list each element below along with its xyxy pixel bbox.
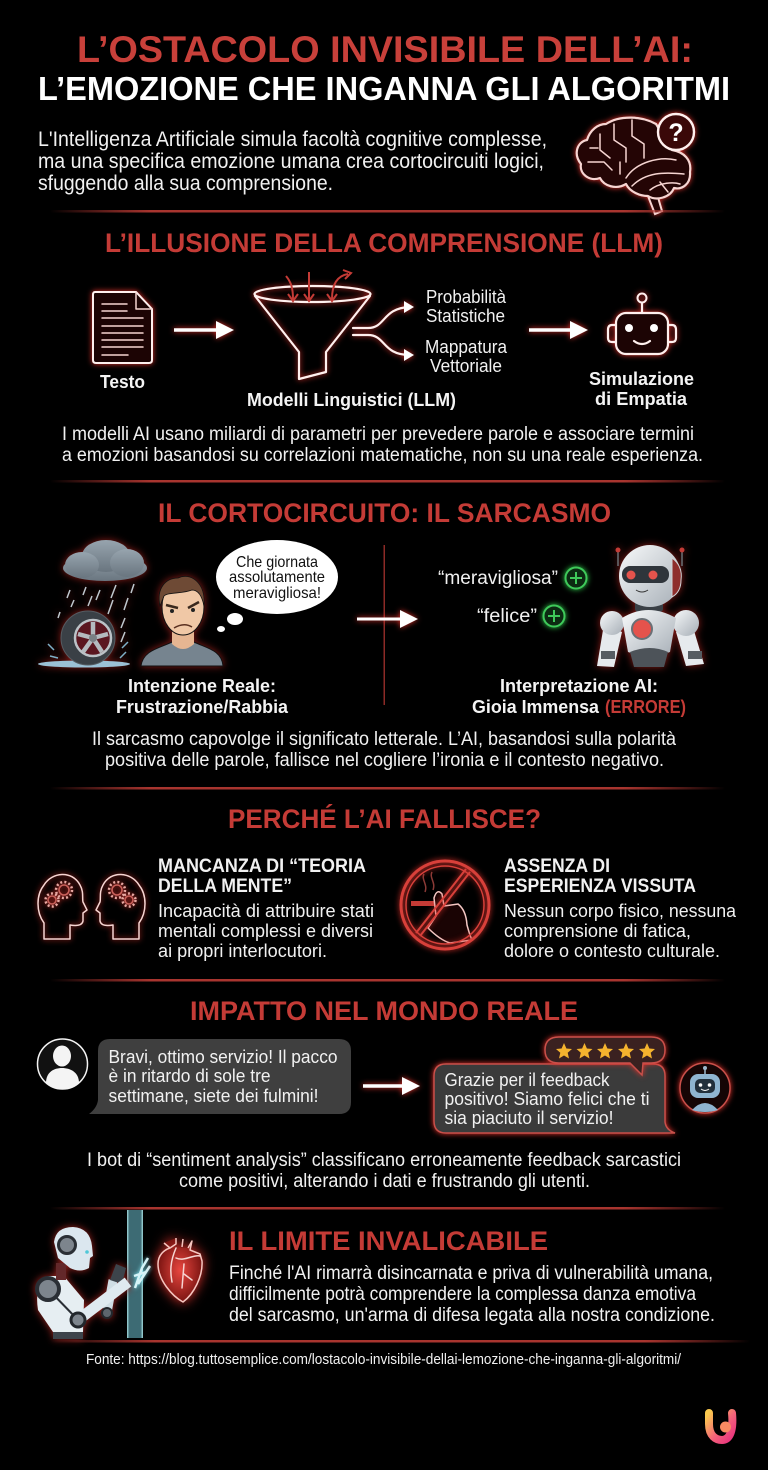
thought bubble: Che giornata (236, 554, 318, 571)
label: AI interpretation: Interpretazione AI: (500, 676, 658, 696)
text: theory of mind: mentali complessi e diversi (158, 921, 373, 941)
rating bubble: five stars (545, 1037, 665, 1075)
illustration: robot touching glass (37, 1210, 150, 1339)
thought bubble (216, 540, 338, 632)
arrow: customer to bot (363, 1077, 420, 1095)
main title (38, 29, 730, 107)
arrow: intention to interpretation (357, 610, 418, 628)
icon: two heads with gears (38, 874, 145, 939)
text: conclusion: difficilmente potrà comprendere la complessa danza emotiva (229, 1284, 696, 1305)
chat bubble: bot reply: positivo! Siamo felici che ti (444, 1089, 650, 1109)
text: lived experience: ASSENZA DI (504, 856, 610, 877)
description: language models: I modelli AI usano miliardi di parametri per prevedere parole e associare termini (62, 424, 694, 445)
heading: why AI fails: PERCHÉ L’AI FALLISCE? (228, 803, 541, 834)
text: conclusion: del sarcasmo, un'arma di difesa legata alla nostra condizione. (229, 1305, 715, 1326)
labels: model outputs: Statistiche (426, 306, 505, 326)
heading: the limit: IL LIMITE INVALICABILE (229, 1226, 548, 1256)
text: theory of mind: DELLA MENTE” (158, 876, 292, 897)
intro text: sfuggendo alla sua comprensione. (38, 172, 333, 195)
label: real intention (116, 676, 289, 717)
text: theory of mind (158, 856, 374, 961)
label: AI interpretation: Gioia Immensa (472, 697, 600, 717)
positive word tags (438, 568, 586, 627)
label: Simulazione di Empatia: di Empatia (595, 389, 688, 409)
labels: model outputs: Probabilità (426, 287, 507, 307)
main title: L’EMOZIONE CHE INGANNA GLI ALGORITMI (38, 70, 730, 107)
positive word tags: “felice” (477, 606, 537, 627)
label: AI interpretation: (ERRORE) (605, 697, 686, 717)
icon: forbidden cigarette and hand (401, 861, 489, 949)
text: conclusion (229, 1263, 715, 1326)
main title: L’OSTACOLO INVISIBILE DELL’AI: (77, 29, 693, 70)
icon: chatbot avatar (680, 1063, 730, 1113)
thought bubble: meravigliosa! (233, 585, 321, 602)
arrow: model to simulation (529, 321, 588, 339)
arrows: model outputs (353, 301, 414, 361)
label: real intention: Intenzione Reale: (128, 676, 276, 696)
icon: funnel (254, 270, 370, 379)
text: theory of mind: MANCANZA DI “TEORIA (158, 856, 366, 877)
arrow: text to model (174, 321, 234, 339)
description: sarcasm: positiva delle parole, fallisce nel cogliere l’ironia e il contesto negativo. (105, 750, 664, 771)
logo (709, 1413, 732, 1440)
description: sentiment analysis: I bot di “sentiment analysis” classificano erroneamente feedback sarcastici (87, 1150, 681, 1171)
icon: smiling robot (608, 294, 676, 354)
chat bubble: customer (89, 1039, 351, 1114)
intro text: L'Intelligenza Artificiale simula facoltà cognitive complesse, (38, 128, 547, 151)
icon: brain with question mark: ? (668, 119, 684, 147)
icon: brain with question mark (577, 114, 694, 214)
text: lived experience: Nessun corpo fisico, nessuna (504, 901, 737, 921)
icon: text document (93, 292, 152, 363)
description: language models: a emozioni basandosi su correlazioni matematiche, non su una reale esperienza. (62, 445, 703, 466)
text: lived experience: ESPERIENZA VISSUTA (504, 876, 696, 897)
illustration: rain cloud and flat tire (38, 540, 147, 668)
chat bubble: customer: Bravi, ottimo servizio! Il pacco (108, 1047, 338, 1067)
heading: sarcasm: IL CORTOCIRCUITO: IL SARCASMO (158, 498, 611, 528)
text: theory of mind: ai propri interlocutori. (158, 941, 327, 961)
description: language models (62, 424, 703, 466)
text: conclusion: Finché l'AI rimarrà disincarnata e priva di vulnerabilità umana, (229, 1263, 713, 1284)
label: AI interpretation (472, 676, 686, 717)
labels: model outputs: Mappatura (425, 337, 508, 357)
labels: model outputs: Vettoriale (430, 356, 502, 376)
icon: glowing heart (158, 1238, 202, 1302)
illustration: white robot (597, 545, 704, 667)
source line: Fonte: https://blog.tuttosemplice.com/lostacolo-invisibile-dellai-lemozione-che-inganna-gli-algoritmi/ (86, 1352, 682, 1368)
text: lived experience: dolore o contesto culturale. (504, 941, 720, 961)
label: Simulazione di Empatia (589, 369, 694, 409)
chat bubble: bot reply: sia piaciuto il servizio! (444, 1108, 614, 1128)
text: lived experience: comprensione di fatica, (504, 921, 691, 941)
description: sentiment analysis (87, 1150, 681, 1192)
intro text (38, 128, 547, 195)
label: Modelli Linguistici: Modelli Linguistici (LLM) (247, 390, 456, 410)
thought bubble: assolutamente (229, 569, 325, 586)
description: sarcasm: Il sarcasmo capovolge il significato letterale. L’AI, basandosi sulla polarità (92, 729, 676, 750)
labels: model outputs (425, 287, 508, 376)
description: sentiment analysis: come positivi, alterando i dati e frustrando gli utenti. (179, 1171, 590, 1192)
chat bubble: bot reply: Grazie per il feedback (444, 1070, 610, 1090)
intro text: ma una specifica emozione umana crea cortocircuiti logici, (38, 150, 544, 173)
chat bubble: bot reply (434, 1064, 675, 1133)
label: real intention: Frustrazione/Rabbia (116, 697, 289, 717)
chat bubble: customer: è in ritardo di sole tre (108, 1066, 270, 1086)
description: sarcasm (92, 729, 676, 771)
icon: user avatar (38, 1039, 88, 1089)
text: theory of mind: Incapacità di attribuire stati (158, 901, 374, 921)
positive word tags: “meravigliosa” (438, 568, 558, 589)
heading: illusion of understanding: L’ILLUSIONE DELLA COMPRENSIONE (LLM) (105, 228, 663, 258)
label: Simulazione di Empatia: Simulazione (589, 369, 694, 389)
illustration: frustrated man (141, 576, 223, 666)
text: lived experience (504, 856, 737, 961)
label: Testo: Testo (100, 372, 145, 392)
heading: real-world impact: IMPATTO NEL MONDO REALE (190, 996, 578, 1026)
chat bubble: customer: settimane, siete dei fulmini! (108, 1086, 318, 1106)
